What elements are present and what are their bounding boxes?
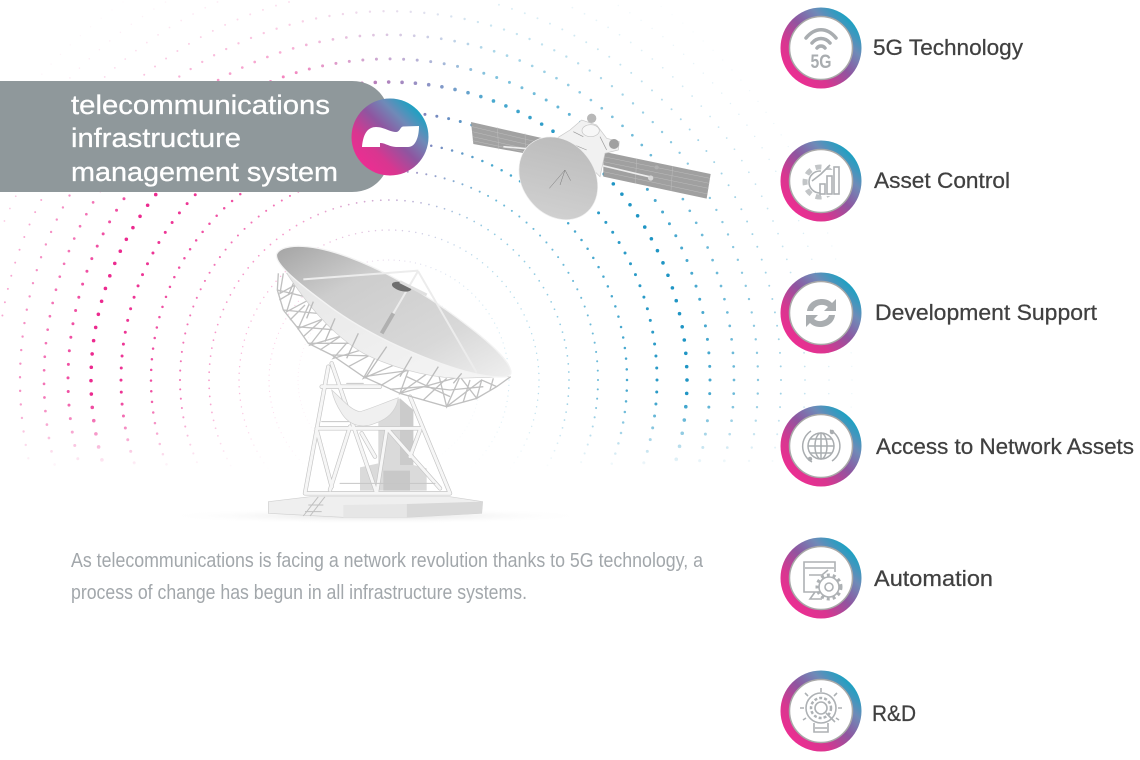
title text: telecommunications: [71, 90, 330, 120]
item: Development Support: [780, 272, 1097, 354]
item: Asset Control: [780, 140, 1010, 222]
counterweight: [332, 390, 398, 426]
title banner: [0, 81, 389, 192]
label: R&D: [872, 701, 916, 726]
reflector lattice: [277, 273, 511, 407]
left solar panel: [471, 122, 553, 157]
title text: [71, 90, 338, 187]
icon: bulb with gear: [800, 688, 842, 732]
equipment housing: [360, 398, 427, 491]
reflector dish face: [276, 246, 511, 377]
item: 5G Technology: [780, 8, 1023, 88]
item: Access to Network Assets: [780, 406, 1134, 486]
ground shadow: [160, 508, 590, 524]
label: 5G Technology: [873, 35, 1023, 60]
title text: infrastructure: [71, 123, 241, 153]
description paragraph: process of change has begun in all infrastructure systems.: [71, 582, 527, 604]
item: Automation: [780, 538, 993, 618]
reflector ribs: [288, 283, 462, 385]
icon: gear and bars: [805, 165, 841, 197]
title text: management system: [71, 157, 338, 187]
satellite dish: [503, 121, 614, 235]
support frame: [305, 363, 450, 493]
icon: monitor and gear: [804, 562, 841, 599]
satellite: [471, 114, 711, 235]
icon: wifi 5G: [806, 30, 836, 73]
description paragraph: [71, 550, 704, 604]
label: Automation: [874, 566, 993, 591]
reflector bowl: [287, 273, 508, 378]
item: R&D: [780, 670, 916, 752]
icon: wifi 5G: 5G: [810, 52, 832, 73]
icon: refresh arrows: [806, 299, 836, 327]
icon: globe: [803, 430, 840, 462]
concentric dotted signal rings: [2, 2, 852, 470]
label: Access to Network Assets: [876, 434, 1134, 459]
logo badge: [352, 98, 428, 176]
label: Asset Control: [874, 168, 1010, 193]
satellite body: [557, 114, 619, 177]
label: Development Support: [875, 300, 1097, 325]
right solar panel: [600, 152, 711, 199]
antenna base: [268, 497, 483, 517]
parabolic antenna: [268, 246, 511, 517]
description paragraph: As telecommunications is facing a network revolution thanks to 5G technology, a: [71, 550, 704, 572]
feed struts: [303, 271, 477, 373]
